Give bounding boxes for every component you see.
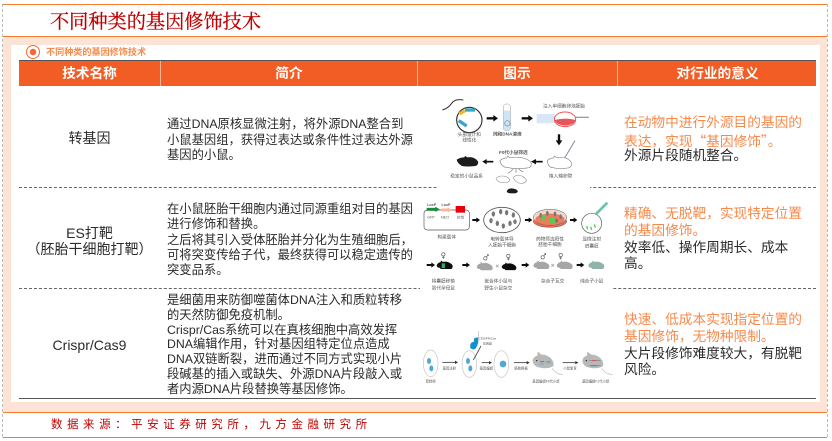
diagram: ES targeting workflow: 纯合子小鼠 [580,277,604,284]
diagram: CRISPR/Cas9 workflow: 基因编辑F1代小鼠 [582,378,610,383]
diagram: transgenic workflow: 头部设计和 [458,131,481,138]
diagram: ES targeting workflow: 药物筛选阳性 [536,236,564,243]
diagram: ES targeting workflow: 电转载体导 [490,236,514,243]
diagram: CRISPR/Cas9 workflow: 胚胎移植 [514,366,528,371]
title: 不同种类的基因修饰技术 [50,12,261,33]
row 3 significance: 大片段修饰难度较大，有脱靶 [624,346,802,360]
diagram: ES targeting workflow: 杂合子互交 [541,277,565,284]
row 3 significance: 基因修饰，无物种限制。 [624,328,775,344]
row 2 introduction: 之后将其引入受体胚胎并分化为生殖细胞后， [167,233,413,247]
row 1 significance: 外源片段随机整合。 [624,148,747,163]
row 2 significance: 的基因修饰。 [624,222,706,238]
row 2 introduction [167,202,413,277]
row 2 significance: 高。 [624,256,651,271]
row 2 introduction: 可将突变传给子代，最终获得可以稳定遗传的 [167,248,413,262]
diagram: CRISPR/Cas9 workflow: 基因编辑 [480,366,494,371]
row 3 significance [624,312,802,377]
diagram: ES targeting workflow: 抗性 [457,215,465,220]
row 1 introduction: 小鼠基因组，获得过表达或条件性过表达外源 [167,132,413,146]
diagram: ES targeting workflow: 进囊胚 [585,242,599,249]
row name: CRISPR: Crispr/Cas9 [53,337,126,353]
row name: ES targeting: ES打靶 [66,225,113,241]
header: industry significance: 对行业的意义 [676,66,759,81]
row 1 significance: 在动物中进行外源目的基因的 [624,115,802,130]
row 2 significance [624,206,802,271]
row 2 introduction: 进行修饰和替换。 [167,217,265,231]
diagram: ES targeting workflow [420,193,614,291]
diagram: transgenic workflow: 植入输卵管 [549,173,573,180]
diagram: transgenic workflow: 稳定的小鼠品系 [450,173,483,180]
row 3 introduction: 段碱基的插入或缺失、外源DNA片段敲入或 [167,367,402,381]
row 3 introduction: 者内源DNA片段替换等基因修饰。 [167,382,353,396]
row 1 significance: 表达，实现“基因修饰”。 [624,130,781,150]
table header [19,61,816,86]
row 1 introduction: 基因的小鼠。 [167,148,241,162]
row 2 significance: 精确、无脱靶，实现特定位置 [624,206,802,221]
row 3 introduction: DNA编辑作用，针对基因组特定位点造成 [167,337,390,351]
diagram: CRISPR/Cas9 workflow: 基因注射 [443,366,457,371]
diagram: ES targeting workflow: 显微注射 [582,236,601,243]
diagram: ES targeting workflow: 构建载体 [437,233,456,240]
row 2 significance: 效率低、操作周期长、成本 [624,240,788,254]
diagram: ES targeting workflow: 将囊胚移植 [432,277,455,284]
diagram: CRISPR/Cas9 workflow: 小鼠繁育 [563,366,577,371]
row 3 introduction: 是细菌用来防御噬菌体DNA注入和质粒转移 [167,293,402,307]
row 3 introduction: Crispr/Cas系统可以在真核细胞中高效发挥 [167,323,397,337]
diagram: transgenic workflow: 纯和DNA溶液 [493,131,522,138]
diagram: transgenic workflow: F0代小鼠筛选 [499,149,528,156]
diagram: ES targeting workflow: 到代孕母鼠 [432,284,455,291]
diagram: ES targeting workflow: 胚胎干细胞 [538,241,562,248]
header: introduction: 简介 [275,66,303,81]
row 2 introduction: 在小鼠胚胎干细胞内通过同源重组对目的基因 [167,202,413,216]
diagram: CRISPR/Cas9 workflow: 基因敲 [483,340,492,345]
row 2 introduction: 突变品系。 [167,263,228,277]
row 3 introduction: DNA双链断裂，进而通过不同方式实现小片 [167,352,402,366]
diagram: ES targeting workflow: LoxP [442,203,451,207]
diagram: ES targeting workflow: NEO [441,216,449,220]
row 1 introduction: 通过DNA原核显微注射，将外源DNA整合到 [167,117,403,131]
section subheading: 不同种类的基因修饰技术 [46,47,146,57]
diagram: CRISPR/Cas9 workflow: 受精卵 [426,378,436,383]
row 1 introduction [167,117,413,162]
diagram: transgenic workflow: 注入单细胞卵泡胚胎 [543,102,585,109]
header: technology name: 技术名称 [62,66,117,81]
diagram: ES targeting workflow: GFP [427,216,435,220]
row name: ES targeting: （胚胎干细胞打靶） [26,238,152,258]
diagram: ES targeting workflow: 嵌合体小鼠与 [484,277,513,284]
diagram: ES targeting workflow: 野生小鼠杂交 [484,284,513,291]
diagram: ES targeting workflow: LoxP [427,203,437,207]
section icon: target circle [26,45,40,59]
row 3 introduction [167,293,402,396]
diagram: transgenic workflow [438,99,590,194]
footer source note: 数据来源：平安证券研究所，九方金融研究所 [51,419,372,431]
row 3 significance: 风险。 [624,362,665,377]
diagram: transgenic workflow: 线性化 [462,136,477,143]
row 3 introduction: 的天然防御免疫机制。 [167,308,290,322]
row 3 significance: 快速、低成本实现指定位置的 [624,312,802,327]
diagram: ES targeting workflow: 入胚胎干细胞 [488,242,516,249]
row name: transgenic: 转基因 [68,130,110,146]
diagram: CRISPR/Cas9 workflow [423,331,612,384]
row name: ES targeting [26,225,152,258]
header: diagram: 图示 [503,66,531,81]
diagram: CRISPR/Cas9 workflow: 基因编辑F0代小鼠 [532,378,560,383]
diagram: CRISPR/Cas9 workflow: CRISPR/Cas [479,336,497,340]
row 1 significance [624,115,802,163]
panel: main white content [11,45,820,402]
